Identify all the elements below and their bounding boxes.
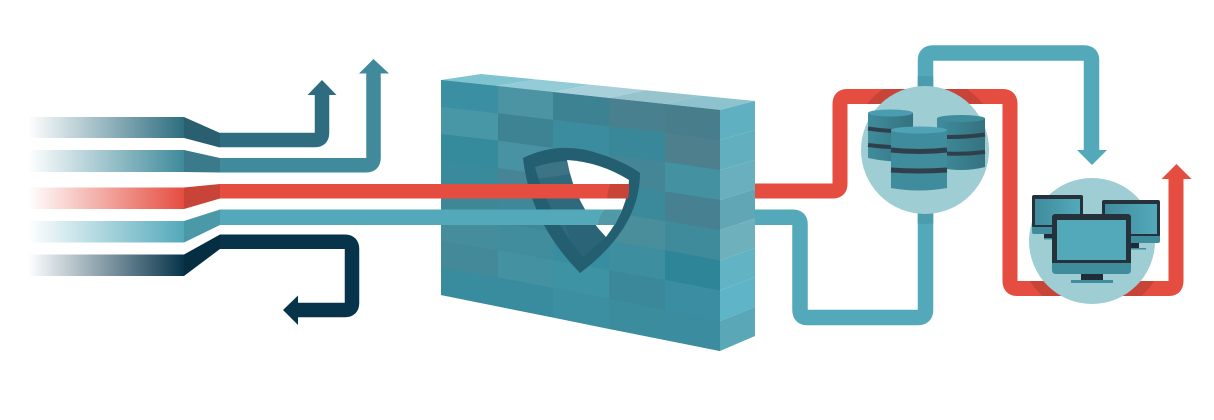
circle shadows on paths (865, 76, 1154, 302)
shield inner panel (535, 161, 584, 240)
diagram (33, 45, 1192, 351)
arrow: deflected teal up (220, 59, 389, 165)
database left cylinder (868, 110, 913, 162)
database node (861, 86, 989, 214)
left monitor (1032, 195, 1083, 240)
arrow: blocked navy returning (220, 242, 352, 325)
right monitor (1102, 200, 1160, 250)
red line through wall (220, 184, 629, 198)
firewall wall (441, 74, 755, 351)
database right cylinder (937, 115, 985, 170)
database circle (861, 86, 989, 214)
client circle (1029, 178, 1155, 304)
blue path to servers and clients (755, 53, 1107, 318)
shield frame (523, 148, 640, 273)
arrow: deflected dark teal up (220, 80, 336, 140)
incoming traffic bands (28, 117, 220, 276)
shield hole (567, 160, 629, 237)
wall side face (720, 101, 755, 351)
red path to servers and clients (755, 96, 1192, 288)
client node (1029, 178, 1160, 304)
database center cylinder (891, 126, 947, 190)
wall front bricks (441, 80, 720, 351)
shield opening (523, 148, 640, 273)
wall top face (441, 74, 755, 110)
blue line through wall (220, 210, 622, 225)
center monitor (1052, 214, 1131, 283)
